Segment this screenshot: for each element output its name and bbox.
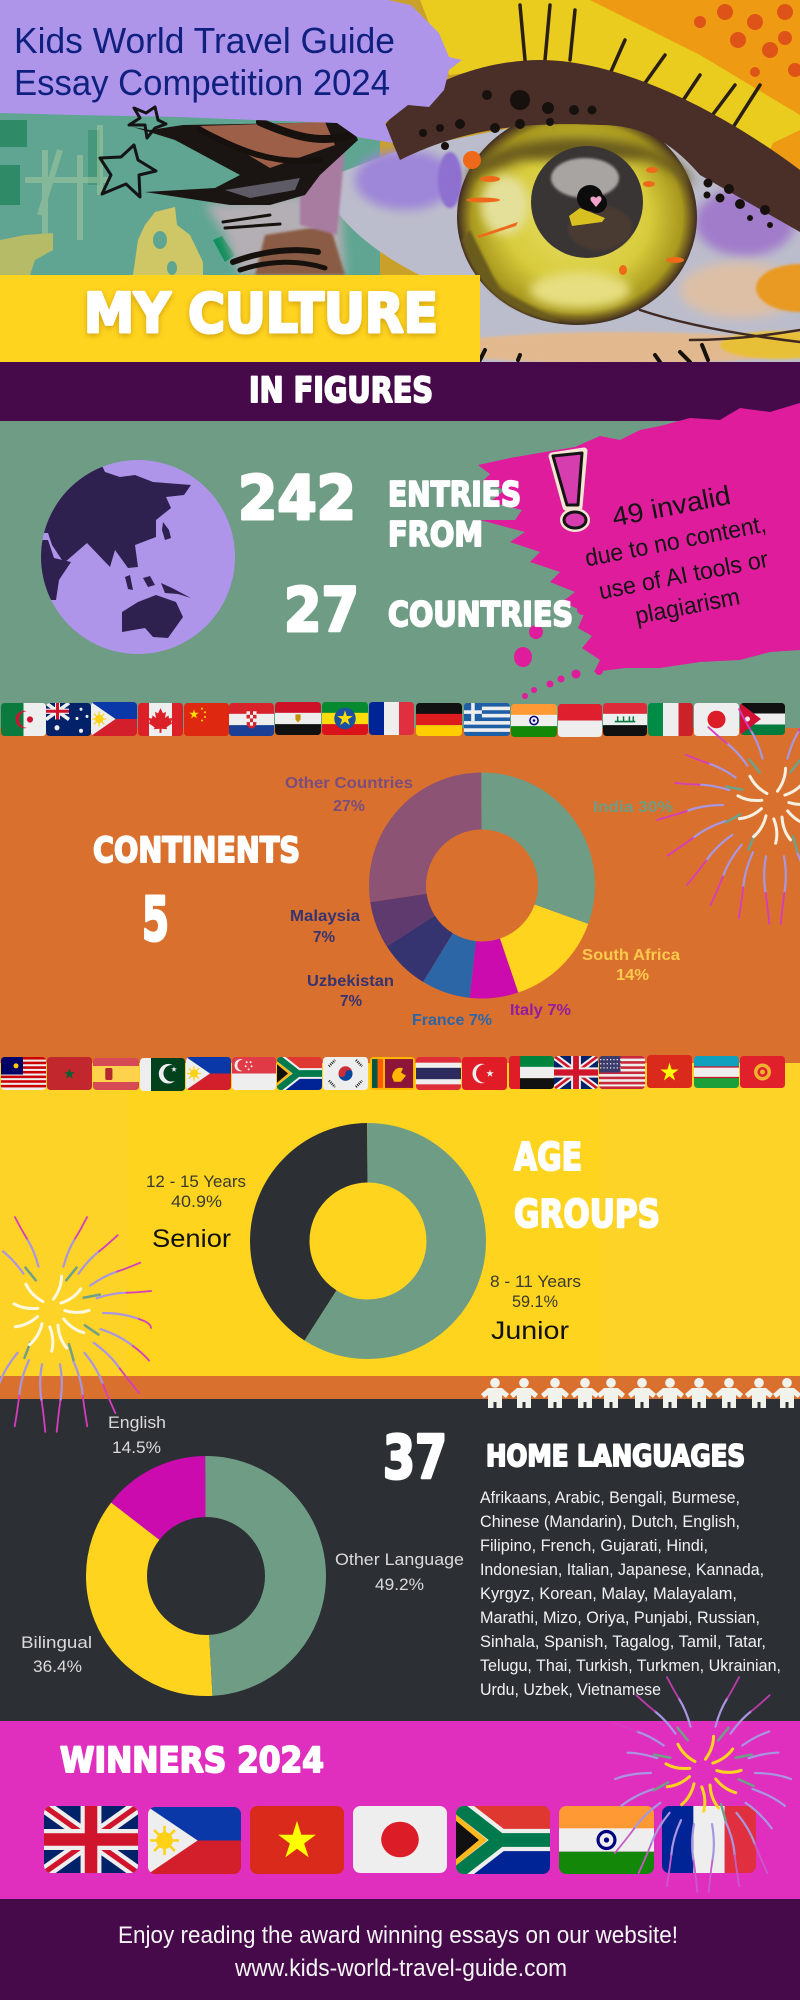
flag: South Africa bbox=[456, 1806, 550, 1874]
pink brush stroke bbox=[478, 403, 800, 672]
flag: France bbox=[369, 702, 414, 735]
chart labels: Malaysia bbox=[290, 908, 360, 925]
footer text: www.kids-world-travel-guide.com bbox=[234, 1955, 567, 1982]
chart labels bbox=[285, 775, 680, 1029]
flags row 1 bbox=[1, 702, 785, 737]
stat: 242 entries from bbox=[238, 463, 521, 555]
flag: Jordan bbox=[740, 703, 785, 735]
flag: UAE bbox=[509, 1056, 554, 1089]
globe bbox=[41, 460, 235, 654]
panel: age groups bbox=[0, 1063, 800, 1376]
list of languages: Filipino, French, Gujarati, Hindi, bbox=[480, 1536, 708, 1555]
label: senior bbox=[146, 1172, 246, 1253]
stat: 27 countries: COUNTRIES bbox=[388, 595, 573, 635]
flag: Pakistan bbox=[140, 1058, 185, 1091]
flag: Vietnam bbox=[250, 1806, 344, 1874]
firework: winners bbox=[610, 1676, 791, 1892]
chart labels: South Africa bbox=[582, 947, 680, 964]
footer text bbox=[118, 1922, 678, 1982]
heading: winners 2024: WINNERS 2024 bbox=[60, 1741, 324, 1781]
flag: Malaysia bbox=[1, 1057, 46, 1090]
list of languages: Afrikaans, Arabic, Bengali, Burmese, bbox=[480, 1488, 740, 1507]
stat: 27 countries bbox=[284, 575, 573, 646]
firework: right of continents bbox=[657, 708, 800, 924]
flag: Spain bbox=[93, 1058, 139, 1090]
stat: 242 entries from: ENTRIES bbox=[388, 475, 521, 515]
icon: outlined stars bbox=[100, 107, 166, 197]
label: junior: 8 - 11 Years bbox=[490, 1272, 581, 1291]
flag: Italy bbox=[648, 703, 693, 736]
flag: India bbox=[559, 1806, 654, 1874]
list of languages bbox=[480, 1488, 781, 1699]
icon: exclamation mark bbox=[552, 451, 587, 529]
label: senior: 40.9% bbox=[171, 1192, 222, 1211]
flag: Canada bbox=[138, 703, 183, 736]
flag: Kyrgyzstan bbox=[740, 1056, 785, 1088]
label: senior: Senior bbox=[152, 1225, 231, 1253]
chart labels: 14.5% bbox=[112, 1438, 161, 1457]
list of languages: Chinese (Mandarin), Dutch, English, bbox=[480, 1512, 740, 1531]
flag: Algeria bbox=[1, 703, 46, 736]
flag: Indonesia bbox=[558, 704, 602, 737]
donut chart: countries bbox=[398, 801, 566, 970]
stat: 5: 5 bbox=[142, 884, 169, 955]
panel: footer bbox=[0, 1899, 800, 2000]
flag: United Kingdom bbox=[44, 1806, 138, 1873]
banner: in figures bbox=[0, 362, 800, 421]
band: orange divider bbox=[0, 1376, 800, 1399]
chart labels bbox=[21, 1413, 464, 1676]
callout: invalid entries bbox=[583, 480, 771, 630]
donut chart: languages bbox=[116, 1486, 296, 1666]
heading: age groups bbox=[514, 1135, 660, 1236]
flag: Japan bbox=[353, 1806, 447, 1873]
panel: winners bbox=[0, 1721, 800, 1899]
flag: India bbox=[511, 704, 557, 737]
flag: Sri Lanka bbox=[370, 1057, 415, 1090]
heading: age groups: AGE bbox=[514, 1135, 582, 1179]
stat: 37: 37 bbox=[383, 1423, 447, 1493]
callout: invalid entries: use of AI tools or bbox=[597, 546, 771, 605]
banner: my culture bbox=[0, 275, 480, 362]
chart labels: 14% bbox=[616, 967, 649, 984]
chart labels: 7% bbox=[313, 929, 335, 946]
donut chart: age bbox=[280, 1153, 456, 1329]
heading: home languages: HOME LANGUAGES bbox=[486, 1439, 745, 1473]
list of languages: Marathi, Mizo, Oriya, Punjabi, Russian, bbox=[480, 1608, 760, 1627]
chart labels: 36.4% bbox=[33, 1657, 82, 1676]
list of languages: Indonesian, Italian, Japanese, Kannada, bbox=[480, 1560, 764, 1579]
flag: South Africa bbox=[277, 1057, 322, 1090]
flag: Egypt bbox=[275, 702, 321, 735]
chart labels: Bilingual bbox=[21, 1633, 92, 1652]
label: junior: 59.1% bbox=[512, 1292, 558, 1311]
stat: 242 entries from: 242 bbox=[238, 463, 356, 534]
banner: my culture: MY CULTURE bbox=[84, 282, 438, 345]
icon: paper people chain bbox=[481, 1378, 800, 1408]
panel: entries bbox=[0, 403, 800, 731]
stat: 242 entries from: FROM bbox=[388, 515, 483, 555]
flag: USA bbox=[599, 1056, 645, 1089]
panel: home languages bbox=[0, 1399, 800, 1721]
chart labels: France 7% bbox=[412, 1012, 492, 1029]
flag: Uzbekistan bbox=[694, 1056, 739, 1088]
footer text: Enjoy reading the award winning essays on our website! bbox=[118, 1922, 678, 1949]
flag: Greece bbox=[464, 703, 510, 736]
heading: age groups: GROUPS bbox=[514, 1192, 660, 1236]
callout: invalid entries: due to no content, bbox=[583, 511, 768, 572]
panel: continents bbox=[0, 728, 800, 1063]
flag: Turkey bbox=[462, 1057, 507, 1090]
list of languages: Urdu, Uzbek, Vietnamese bbox=[480, 1680, 661, 1699]
label: senior: 12 - 15 Years bbox=[146, 1172, 246, 1191]
callout: invalid entries: 49 invalid bbox=[610, 480, 733, 532]
flag: Singapore bbox=[232, 1057, 276, 1090]
flag: Vietnam bbox=[647, 1055, 692, 1088]
flag: Philippines bbox=[91, 702, 137, 736]
flags row 2 bbox=[1, 1055, 785, 1091]
stat: 27 countries: 27 bbox=[284, 575, 359, 646]
flag: China bbox=[184, 703, 229, 736]
title text: Kids World Travel Guide bbox=[14, 20, 395, 61]
flag: Japan bbox=[694, 703, 739, 736]
label: junior: Junior bbox=[491, 1317, 569, 1345]
flag: Australia bbox=[46, 703, 91, 736]
chart labels: Other Countries bbox=[285, 775, 413, 792]
chart labels: 7% bbox=[340, 993, 362, 1010]
list of languages: Sinhala, Spanish, Tagalog, Tamil, Tatar, bbox=[480, 1632, 766, 1651]
flag: Philippines bbox=[148, 1807, 241, 1874]
chart labels: 27% bbox=[333, 798, 365, 815]
list of languages: Telugu, Thai, Turkish, Turkmen, Ukrainian, bbox=[480, 1656, 781, 1675]
chart labels: Uzbekistan bbox=[307, 973, 394, 990]
chart labels: Italy 7% bbox=[510, 1002, 571, 1019]
flag: Morocco bbox=[47, 1057, 92, 1090]
heading: continents: CONTINENTS bbox=[93, 831, 300, 871]
photo: painted eye mural bbox=[0, 0, 800, 364]
chart labels: Other Language bbox=[335, 1550, 464, 1569]
chart labels: English bbox=[108, 1413, 166, 1432]
title blob bbox=[0, 0, 462, 143]
flag: Croatia bbox=[229, 703, 274, 736]
title text: Essay Competition 2024 bbox=[14, 62, 390, 103]
callout: invalid entries: plagiarism bbox=[633, 583, 742, 630]
flag: South Korea bbox=[323, 1057, 368, 1090]
banner: in figures: IN FIGURES bbox=[249, 371, 433, 411]
firework: left of age groups bbox=[0, 1216, 152, 1432]
flag: France bbox=[662, 1806, 756, 1873]
flag: Germany bbox=[416, 703, 462, 736]
label: junior bbox=[490, 1272, 581, 1345]
title text bbox=[14, 20, 395, 103]
flag: Iraq bbox=[603, 703, 647, 736]
flag: Philippines bbox=[186, 1057, 231, 1090]
chart labels: 49.2% bbox=[375, 1575, 424, 1594]
flag: Thailand bbox=[416, 1057, 461, 1090]
flag: United Kingdom bbox=[554, 1056, 598, 1089]
chart labels: India 30% bbox=[593, 799, 673, 816]
list of languages: Kyrgyz, Korean, Malay, Malayalam, bbox=[480, 1584, 737, 1603]
flag: Ethiopia bbox=[322, 702, 368, 735]
